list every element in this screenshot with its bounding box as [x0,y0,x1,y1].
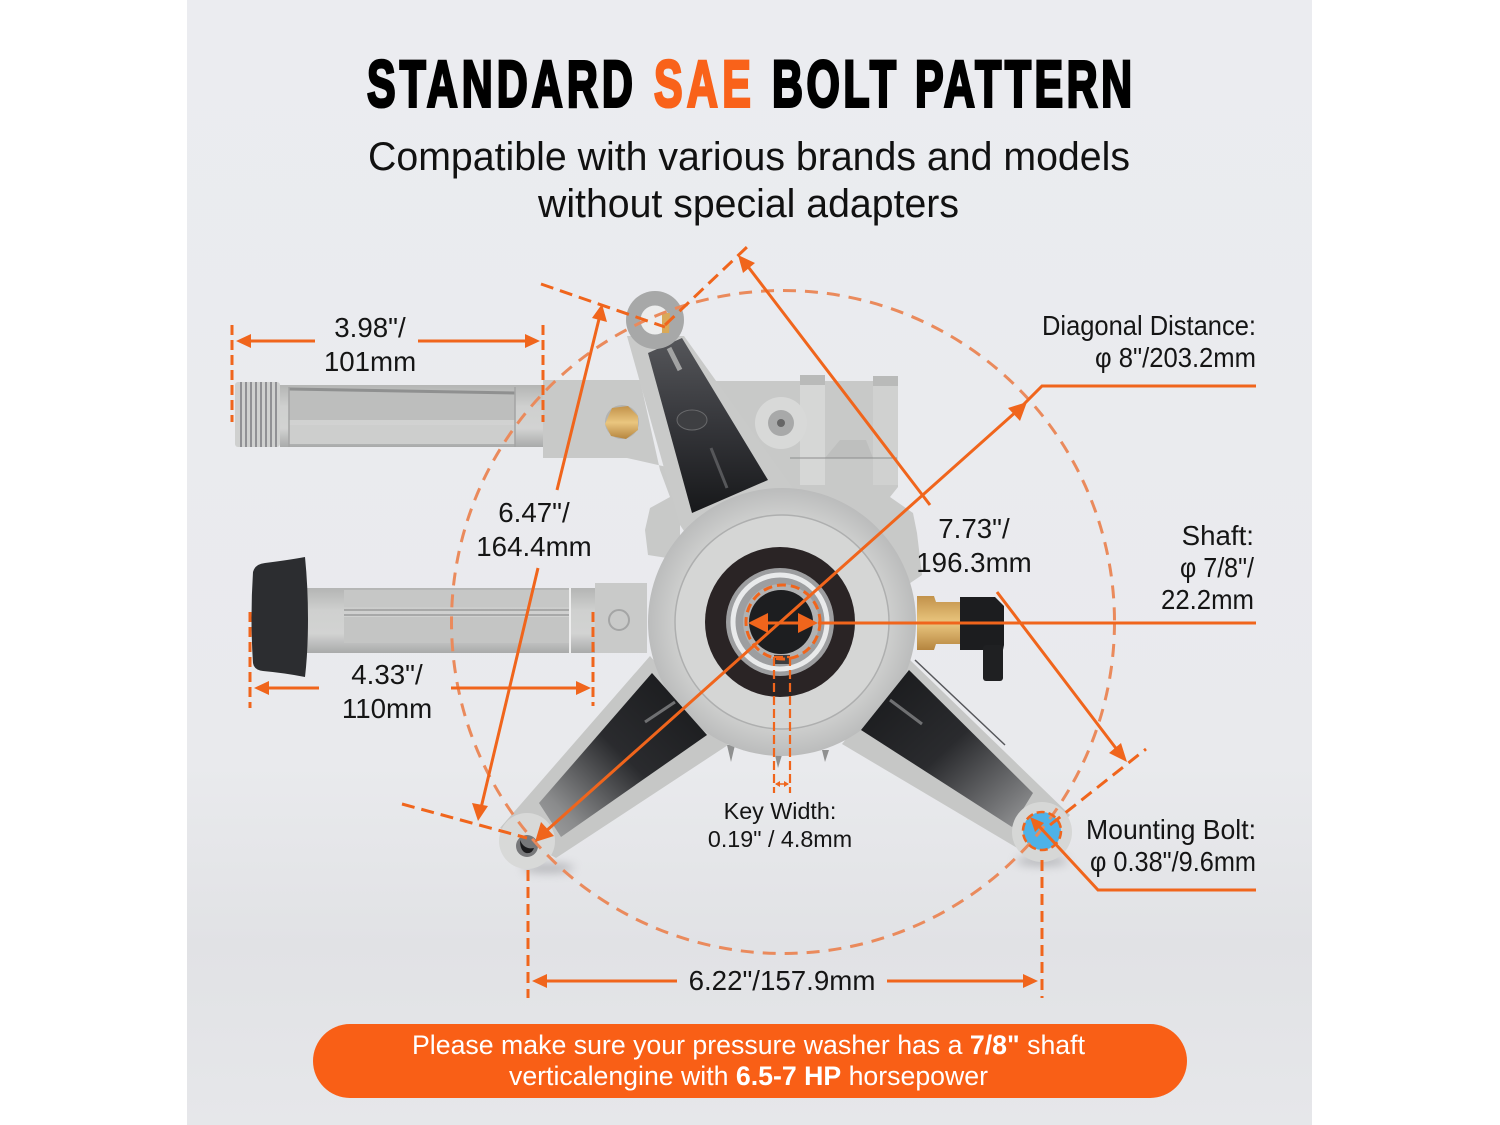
brass plug [605,405,639,439]
dimension: 6.22 inch bolt spacing [528,860,1042,998]
dimension: 6.47 inch bolt spacing [402,284,665,838]
dimension: 7.73 inch bolt spacing [665,247,1146,825]
dimension: 3.98 inch pipe length [232,312,543,422]
shadows under feet [522,857,1068,872]
callout: diagonal distance [535,310,1256,842]
dimension: 6.22 inch bolt spacing: 6.22"/157.9mm [689,965,875,996]
callout: shaft diameter [746,520,1256,659]
dimension: 4.33 inch pipe length: 4.33"/ [351,659,423,690]
background panel [187,0,1312,1125]
rear pump body [543,375,922,590]
flange teeth [727,745,829,768]
title: SAE [654,47,751,121]
dimension: 3.98 inch pipe length: 3.98"/ [334,312,406,343]
callout: mounting bolt [1023,812,1256,890]
callout: key width: 0.19" / 4.8mm [708,826,852,852]
hub and shaft [675,515,889,729]
dimension: 4.33 inch pipe length: 110mm [342,693,432,724]
callout: mounting bolt: Mounting Bolt: [1086,814,1256,845]
title [367,47,1132,121]
arm recesses [648,338,768,513]
callout: key width [708,657,852,852]
callout: diagonal distance: φ 8"/203.2mm [1095,342,1256,373]
lower inlet pipe [296,583,647,653]
dimension: 6.47 inch bolt spacing: 164.4mm [476,531,592,562]
callout: key width: Key Width: [724,798,836,824]
dimension: 6.47 inch bolt spacing: 6.47"/ [498,497,570,528]
mounting eyes [626,291,684,349]
callout: mounting bolt: φ 0.38"/9.6mm [1090,846,1256,877]
pump illustration [235,291,1072,872]
dimension: 7.73 inch bolt spacing: 196.3mm [916,547,1032,578]
three-arm bracket [499,291,1072,869]
subtitle [368,135,1130,226]
notice pill: Please make sure your pressure washer has a 7/8" shaft [412,1030,1085,1060]
callout: diagonal distance: Diagonal Distance: [1042,310,1256,341]
notice pill: verticalengine with 6.5-7 HP horsepower [509,1061,988,1091]
right side brass fitting and elbow [917,596,1004,681]
title: BOLT PATTERN [772,47,1132,121]
dashed bolt circle [452,290,1114,954]
dimension: 3.98 inch pipe length: 101mm [324,346,416,377]
callout: shaft diameter: Shaft: [1182,520,1254,551]
dimension: 4.33 inch pipe length [250,612,593,724]
top discharge pipe [235,382,545,447]
dimension: 7.73 inch bolt spacing: 7.73"/ [938,513,1010,544]
subtitle: without special adapters [537,182,959,226]
notice pill [313,1024,1187,1098]
callout: shaft diameter: φ 7/8"/ [1180,552,1254,583]
subtitle: Compatible with various brands and models [368,135,1130,179]
title: STANDARD [367,47,633,121]
blue bolt hole [1023,812,1061,850]
black hose nut [252,557,308,677]
callout: shaft diameter: 22.2mm [1161,584,1254,615]
